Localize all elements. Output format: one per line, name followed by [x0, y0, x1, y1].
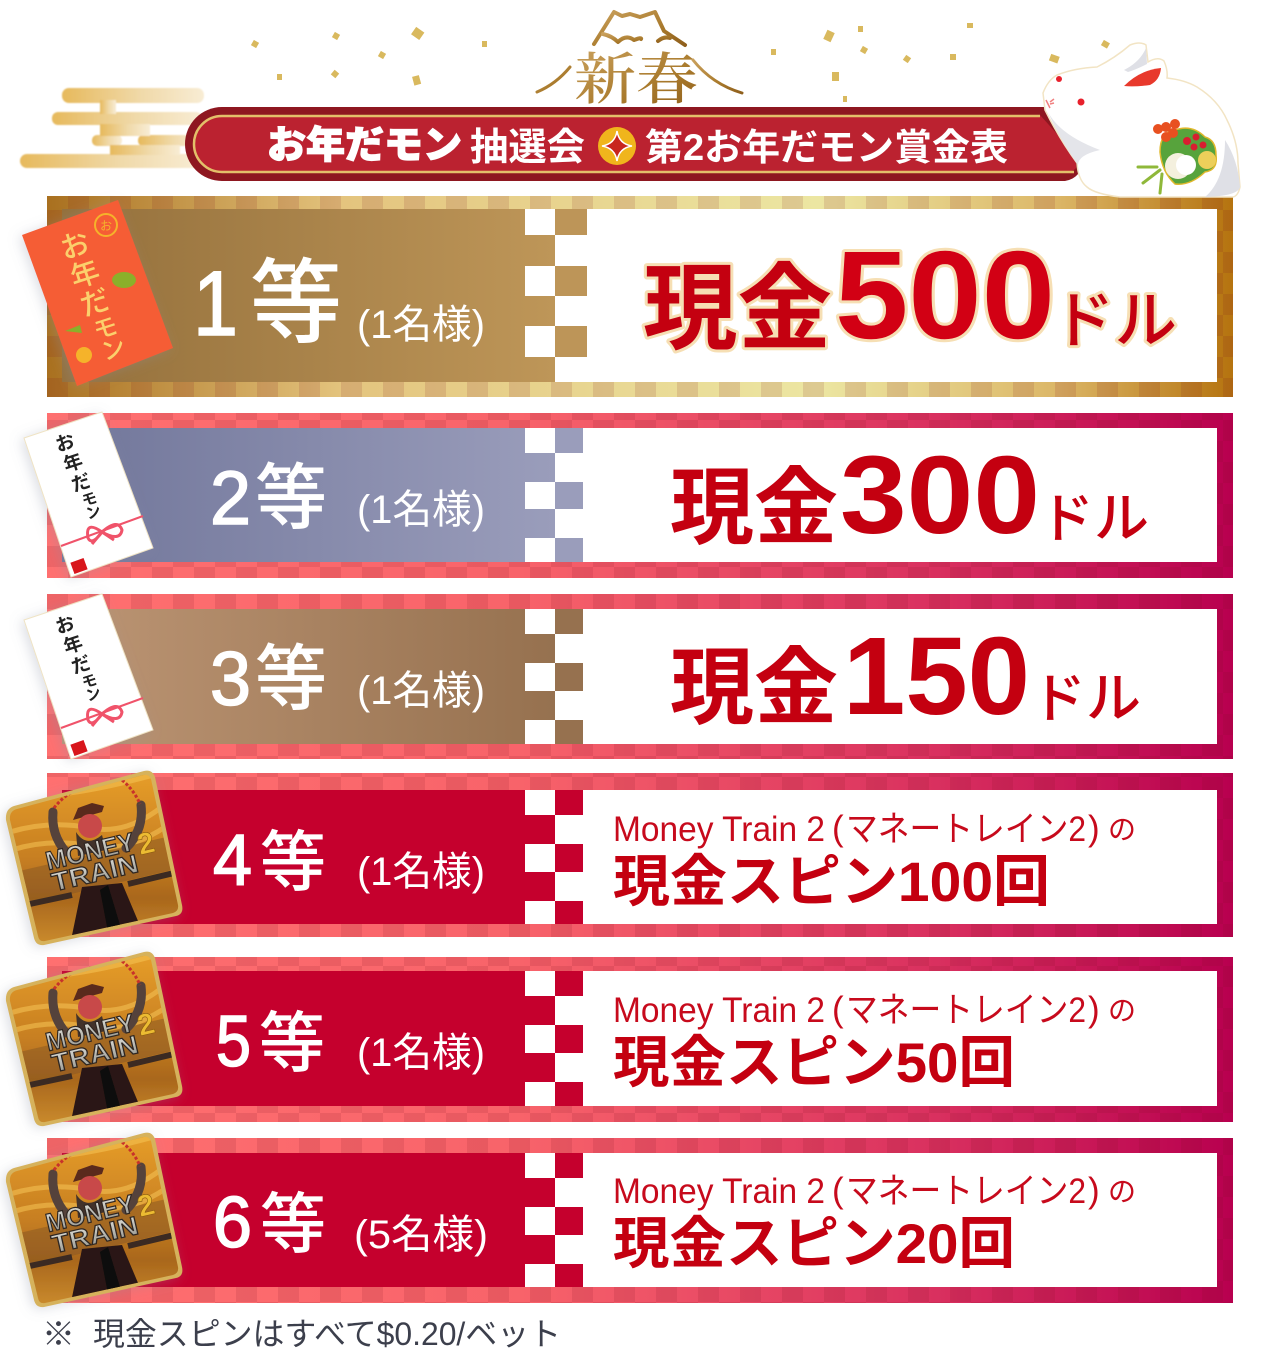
icon: Money Train 2 game: 2 — [134, 1188, 158, 1224]
prize text: Money Train 2 — [613, 1172, 825, 1211]
prize text: マネートレイン2 — [846, 1172, 1086, 1211]
flower decoration — [1138, 119, 1216, 193]
heading: prize table: 第2お年だモン賞金表 — [645, 127, 1008, 168]
icon: Money Train 2 game: MONEY — [43, 1007, 137, 1057]
rank label: 等 — [255, 459, 327, 539]
icon: noshi envelope: モ — [80, 671, 99, 692]
rank label: 1 — [193, 253, 238, 355]
checker — [525, 971, 583, 1106]
panel: 2nd prize — [24, 412, 1233, 578]
rank label: (1名様) — [357, 1031, 485, 1075]
prize text — [613, 990, 1136, 1094]
prize text: の — [1108, 1176, 1136, 1207]
icon: noshi envelope: ン — [84, 502, 103, 523]
panel: 3rd prize — [24, 594, 1233, 759]
checker — [525, 790, 583, 924]
prize text: ) — [1088, 990, 1100, 1029]
prize amount — [643, 226, 1177, 365]
rank label: (1名様) — [357, 850, 485, 894]
icon: red envelope: 年 — [66, 255, 104, 295]
frame — [47, 1138, 1233, 1303]
icon: white rabbit ornament — [1043, 43, 1240, 197]
text: 新春: 新春 — [574, 50, 698, 112]
prize amount: 現金 — [670, 461, 838, 555]
prize text: の — [1108, 995, 1136, 1026]
rabbit ear — [1124, 68, 1161, 86]
prize text: の — [1108, 814, 1136, 845]
icon: red envelope: ン — [98, 333, 129, 366]
title banner: 抽選会 — [470, 127, 585, 169]
title banner — [185, 107, 1082, 181]
footnote: 現金スピンはすべて$0.20/ベット — [93, 1316, 561, 1352]
rank label: 4 — [213, 821, 252, 901]
prize text: ) — [1088, 809, 1100, 848]
rank label: 等 — [250, 253, 342, 355]
icon: Money Train 2 game: TRAIN — [49, 1029, 141, 1078]
prize amount: ドル — [1031, 669, 1141, 729]
prize text: マネートレイン2 — [846, 810, 1086, 849]
prize text: マネートレイン2 — [846, 991, 1086, 1030]
icon: Money Train 2 game — [0, 946, 190, 1131]
heading: lottery name: お年だモン — [267, 125, 462, 167]
rank label — [210, 637, 485, 722]
prize text: 現金スピン20回 — [613, 1212, 1015, 1275]
icon: noshi envelope: だ — [69, 471, 94, 497]
icon: red envelope: モ — [90, 312, 121, 345]
rank label: 等 — [255, 640, 327, 720]
prize amount: 現金 — [670, 641, 838, 735]
rank label: (1名様) — [357, 303, 485, 347]
icon: red envelope: お — [100, 219, 112, 233]
prize text: 現金スピン100回 — [613, 850, 1050, 913]
frame — [47, 413, 1233, 578]
icon: noshi envelope — [24, 412, 153, 577]
prize amount: 300 — [840, 434, 1040, 557]
checker — [525, 428, 583, 562]
banner shape — [185, 107, 1082, 181]
icon: Money Train 2 game: MONEY — [43, 1188, 137, 1238]
frame — [47, 196, 1233, 397]
prize text: ( — [832, 1171, 844, 1210]
rank label — [210, 456, 485, 541]
prize amount — [670, 434, 1149, 557]
icon: noshi envelope — [24, 594, 153, 759]
prize text: Money Train 2 — [613, 991, 825, 1030]
rank label: (1名様) — [357, 488, 485, 532]
rank label: 3 — [210, 637, 251, 722]
icon: noshi envelope: お — [53, 430, 78, 457]
prize amount: 500 — [835, 226, 1055, 365]
prize amount: 現金 — [643, 256, 832, 361]
prize amount: 150 — [843, 615, 1030, 738]
prize text: Money Train 2 — [613, 810, 825, 849]
icon: red envelope: お — [56, 227, 94, 266]
panel: 6th prize — [0, 1127, 1233, 1312]
prize amount: ドル — [1052, 287, 1177, 356]
icon: Money Train 2 game — [0, 1127, 190, 1312]
icon: noshi envelope: ン — [84, 684, 103, 705]
rank label — [213, 821, 485, 901]
icon: Mt Fuji outline — [537, 12, 742, 93]
prize text: ( — [832, 990, 844, 1029]
icon: Money Train 2 game: MONEY — [43, 826, 137, 876]
decoration: gold clouds — [20, 88, 204, 168]
rank label: 6 — [213, 1183, 252, 1263]
icon: noshi envelope: だ — [69, 653, 94, 679]
rank label: (5名様) — [354, 1213, 488, 1257]
decoration: gold confetti — [251, 23, 1110, 102]
icon: Money Train 2 game — [0, 765, 190, 950]
checker — [525, 209, 587, 357]
panel: 5th prize — [0, 946, 1233, 1131]
prize text — [613, 1171, 1136, 1275]
rank label — [213, 1183, 488, 1263]
icon: Money Train 2 game: 2 — [134, 826, 158, 862]
rank label — [216, 1002, 485, 1082]
prize text: 現金スピン50回 — [613, 1031, 1015, 1094]
rabbit eyes and mouth — [1056, 76, 1062, 82]
rank label — [193, 253, 485, 355]
prize amount: ドル — [1039, 489, 1149, 549]
prize text: ( — [832, 809, 844, 848]
prize text: ) — [1088, 1171, 1100, 1210]
icon: noshi envelope: 年 — [60, 449, 86, 477]
checker — [525, 609, 583, 744]
icon: noshi envelope: お — [53, 612, 78, 639]
prize amount — [670, 615, 1141, 738]
prize text — [613, 809, 1136, 913]
icon: Money Train 2 game: 2 — [134, 1007, 158, 1043]
icon: red envelope — [22, 200, 173, 386]
icon: red envelope: だ — [76, 284, 114, 323]
footnote: ※ — [42, 1316, 75, 1352]
frame — [47, 957, 1233, 1122]
frame — [47, 594, 1233, 759]
panel: 1st prize — [22, 196, 1233, 397]
rank label: 5 — [216, 1002, 251, 1082]
icon: Money Train 2 game: TRAIN — [49, 1210, 141, 1259]
rank label: 等 — [259, 1006, 325, 1080]
rank label: (1名様) — [357, 669, 485, 713]
rank label: 2 — [210, 456, 251, 541]
frame — [47, 773, 1233, 937]
icon: gold coin — [598, 127, 636, 165]
panel: 4th prize — [0, 765, 1233, 950]
icon: Money Train 2 game: TRAIN — [49, 848, 141, 897]
logo: Mt Fuji new year mark — [537, 12, 742, 112]
icon: noshi envelope: 年 — [60, 631, 86, 659]
icon: noshi envelope: モ — [80, 489, 99, 510]
checker — [525, 1153, 583, 1287]
rank label: 等 — [260, 1187, 326, 1261]
rank label: 等 — [260, 825, 326, 899]
